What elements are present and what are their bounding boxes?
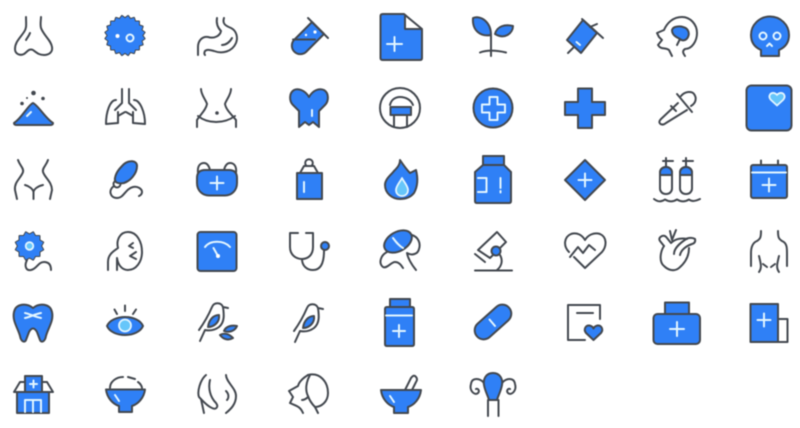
icon: first aid kit	[654, 302, 700, 344]
icon: test tube	[292, 18, 328, 54]
icon: blue cross	[565, 88, 605, 128]
icon: microscope	[475, 232, 512, 270]
icon: skull	[751, 17, 789, 56]
icon: bone	[290, 89, 328, 127]
icon: medical book	[750, 304, 788, 342]
icon: baby bottle	[297, 159, 322, 199]
icon: germ	[105, 16, 145, 55]
icon: anatomical heart	[659, 230, 695, 270]
icon: pharmacy store	[14, 376, 53, 413]
icon: uterus	[471, 373, 515, 416]
icon: head with brain	[657, 17, 697, 56]
icon: bird with leaves	[199, 303, 237, 341]
icon: medicine jar	[475, 156, 511, 203]
icon: side torso	[198, 375, 236, 413]
icon: sprout	[473, 17, 513, 56]
icon: bird	[294, 304, 323, 342]
icon: face profile	[289, 374, 328, 413]
icon: gas tanks	[654, 158, 700, 201]
icon: powder pile	[14, 91, 53, 125]
icon: dropper	[659, 92, 696, 125]
icon: lungs	[106, 89, 145, 124]
icon: calendar	[751, 160, 787, 198]
icon: pill	[471, 301, 515, 343]
icon: hips	[15, 160, 52, 199]
icon: medicine bottle	[385, 299, 414, 346]
icon: circle device	[380, 88, 420, 128]
icon: stomach	[198, 18, 237, 55]
icon: kidney	[108, 232, 142, 270]
icon: mortar and pestle	[381, 376, 421, 413]
icon: medical file	[380, 14, 422, 60]
icon: eye	[107, 306, 143, 335]
icon: ovum	[110, 161, 142, 198]
icon: diamond plus	[565, 160, 605, 200]
icon: vial	[567, 19, 603, 53]
icon: eared bag	[197, 163, 237, 196]
icon: weighing scale	[198, 232, 236, 271]
icon: abdomen	[197, 89, 236, 127]
icon: nose	[15, 17, 52, 55]
icon: flame	[385, 160, 417, 199]
icon: capsule with outline	[380, 226, 420, 270]
icon: tooth	[14, 305, 52, 342]
icon: square heart	[746, 86, 792, 130]
icon: stethoscope	[290, 233, 329, 270]
icon: rice bowl	[106, 377, 145, 412]
icon: back torso	[751, 231, 787, 272]
icon: heart with pulse	[565, 233, 606, 268]
icon: circle plus	[474, 88, 512, 128]
icon: cell with tail	[16, 232, 51, 270]
icon: document with heart	[568, 305, 602, 340]
